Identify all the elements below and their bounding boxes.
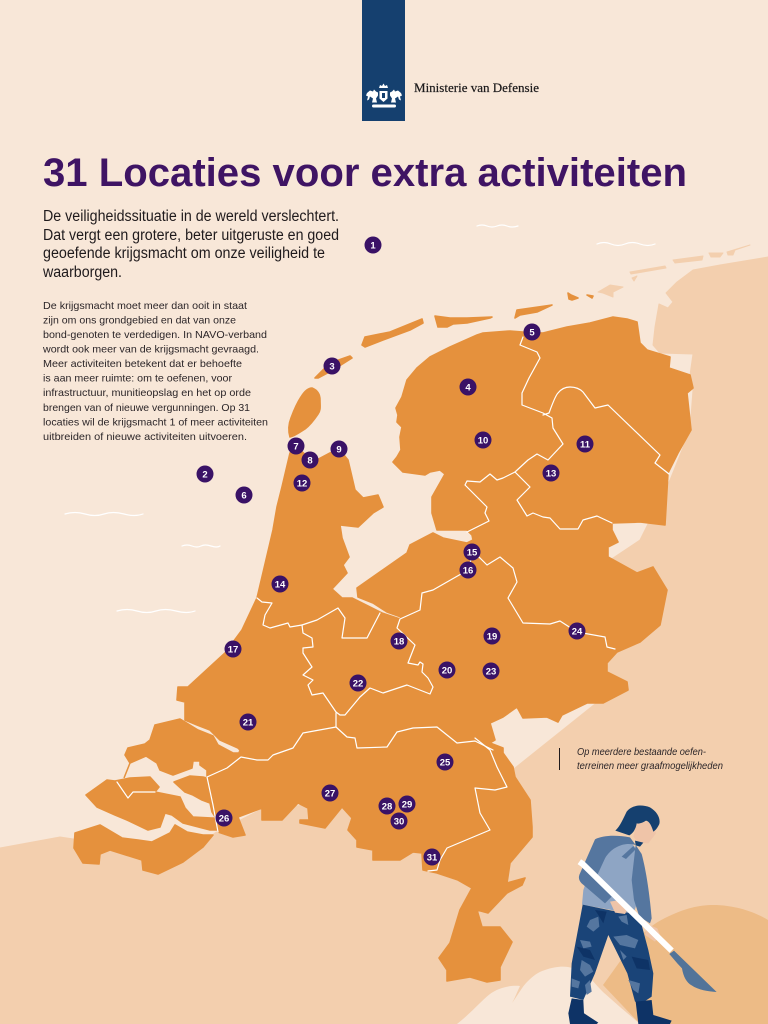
neighbouring land: Germany and Belgium [0, 245, 768, 1024]
numbered location markers: 19 [487, 632, 497, 642]
body text: infrastructuur, munitieopslag en het op orde [43, 387, 251, 399]
body text [42, 300, 268, 443]
camouflage [572, 915, 640, 995]
numbered location markers: 5 [529, 328, 535, 338]
intro text [42, 208, 339, 281]
body text: De krijgsmacht moet meer dan ooit in staat [43, 300, 247, 312]
numbered location markers: 15 [467, 548, 478, 558]
numbered location markers: 24 [572, 626, 583, 638]
body text: Meer activiteiten betekent dat er behoefte [43, 358, 242, 370]
shovel [579, 862, 672, 951]
intro text: waarborgen. [42, 264, 122, 281]
numbered location markers: 14 [275, 580, 286, 590]
numbered location markers: 17 [228, 644, 238, 656]
body text: zijn om ons grondgebied en dat van onze [43, 314, 236, 326]
numbered location markers: 6 [241, 490, 247, 502]
trousers [570, 905, 653, 1003]
numbered location markers: 2 [202, 470, 208, 480]
boots [568, 998, 598, 1024]
province borders [117, 337, 669, 871]
Wadden islands [289, 293, 593, 437]
numbered location markers: 29 [402, 800, 412, 810]
Zeeuws-Vlaanderen [74, 825, 213, 874]
numbered location markers: 20 [442, 666, 452, 676]
arm with sleeve [579, 836, 636, 903]
numbered location markers: 27 [325, 788, 335, 800]
numbered location markers: 22 [353, 678, 363, 690]
numbered location markers: 18 [394, 636, 404, 648]
numbered location markers: 21 [243, 718, 254, 728]
illustration: soldier digging [568, 805, 717, 1024]
body text: locaties wil de krijgsmacht 1 of meer activiteiten [43, 416, 268, 428]
body text: is aan meer ruimte: om te oefenen, voor [43, 372, 232, 384]
mainland [125, 317, 693, 982]
rijkslogo name: Ministerie van Defensie [414, 81, 539, 95]
numbered location markers: 23 [486, 666, 496, 678]
body text: brengen van of nieuwe vergunningen. Op 31 [43, 402, 250, 414]
numbered location markers: 10 [478, 436, 488, 446]
intro text: geoefende krijgsmacht om onze veiligheid te [43, 245, 325, 262]
intro text: De veiligheidssituatie in de wereld verslechtert. [43, 208, 339, 225]
callout [559, 746, 723, 772]
numbered location markers: 12 [297, 478, 307, 490]
Walcheren and Beveland [86, 777, 220, 830]
intro text: Dat vergt een grotere, beter uitgeruste en goed [43, 227, 339, 244]
numbered location markers: 4 [465, 382, 471, 394]
numbered location markers [196, 236, 594, 866]
body text: wordt ook meer van de krijgsmacht gevraagd. [42, 344, 259, 356]
numbered location markers: 25 [440, 758, 451, 768]
numbered location markers: 26 [219, 814, 229, 824]
dam [124, 763, 130, 778]
map of the Netherlands [74, 236, 693, 982]
waves [65, 225, 655, 612]
dunes [457, 905, 768, 1024]
numbered location markers: 1 [370, 240, 376, 252]
numbered location markers: 30 [394, 816, 404, 828]
collar [635, 841, 643, 847]
numbered location markers: 31 [427, 852, 438, 864]
numbered location markers: 13 [546, 468, 556, 480]
hair [615, 805, 660, 835]
face [633, 821, 656, 843]
numbered location markers: 11 [580, 440, 591, 450]
body text: uitbreiden of nieuwe activiteiten uitvoeren. [43, 431, 247, 443]
body text: bond-genoten te verdedigen. In NAVO-verband [43, 329, 267, 341]
numbered location markers: 28 [382, 802, 392, 812]
numbered location markers: 8 [307, 456, 313, 466]
icon: coat of arms [366, 84, 402, 108]
callout: Op meerdere bestaande oefen- [577, 746, 706, 758]
title: 31 Locaties voor extra activiteiten [43, 151, 687, 195]
numbered location markers: 3 [329, 362, 335, 372]
torso [582, 839, 642, 913]
hands [610, 900, 628, 914]
numbered location markers: 16 [463, 566, 473, 576]
numbered location markers: 9 [336, 444, 342, 456]
numbered location markers: 7 [293, 442, 299, 452]
logo: ribbon with coat of arms [362, 0, 539, 121]
callout: terreinen meer graafmogelijkheden [577, 760, 723, 772]
